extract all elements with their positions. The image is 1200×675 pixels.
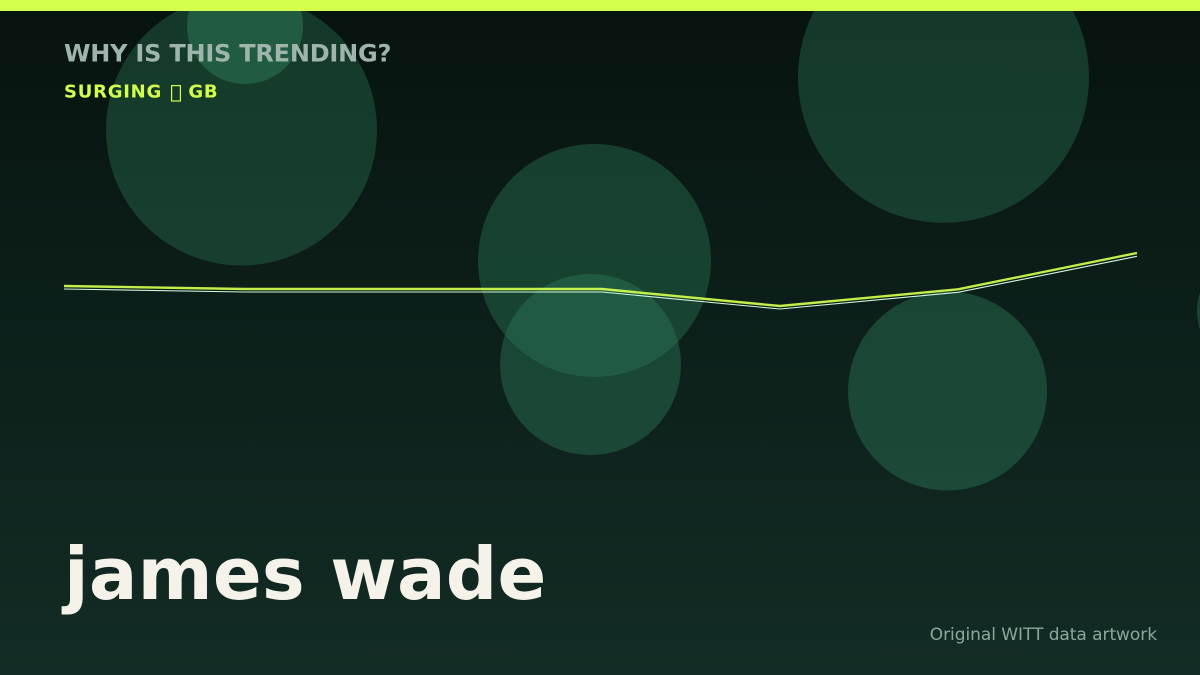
heading: WHY IS THIS TRENDING? [64, 40, 391, 68]
trend line: secondary [64, 256, 1137, 309]
status text: region: GB [188, 82, 218, 102]
trend line: primary [64, 253, 1137, 306]
footer credit: Original WITT data artwork [930, 625, 1157, 645]
status label [64, 82, 218, 102]
status text: surging: SURGING [64, 82, 162, 102]
trend line chart [64, 253, 1137, 309]
icon: missing glyph box [172, 86, 180, 101]
bubble cluster [106, 0, 1200, 491]
top accent bar [0, 0, 1200, 11]
title: james wade [61, 532, 547, 616]
